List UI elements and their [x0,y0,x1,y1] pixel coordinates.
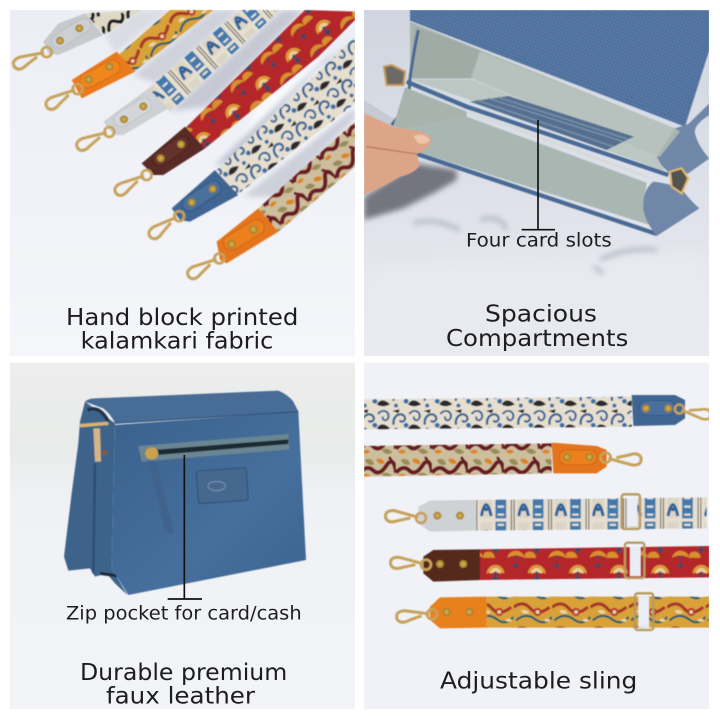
strap: blue panel print with grey leather and buckle [386,494,707,532]
heading: hand block printed kalamkari fabric: Hand block printed [66,305,298,331]
heading: durable premium faux leather: faux leather [106,683,256,709]
callout label: four card slots: Four card slots [466,231,612,252]
side gusset [64,402,127,595]
blue leather bag [64,391,306,595]
panel: hand block printed kalamkari fabric [10,10,355,356]
panel: adjustable sling [364,363,712,709]
flap: perforated blue leather [410,10,709,127]
heading: hand block printed kalamkari fabric [68,308,296,349]
strap: orange leather with maroon fabric [185,122,355,282]
callout label: zip pocket for card/cash: Zip pocket for card/cash [66,603,302,624]
strap: blue leather with blue fabric [147,37,355,242]
heading: adjustable sling: Adjustable sling [440,668,637,694]
panel: durable premium faux leather [10,363,355,709]
hand holding the bag open [364,113,431,195]
front panel [112,412,306,595]
zip pocket [138,434,289,533]
strap: orange leather with yellow fabric [44,10,213,113]
logo patch [196,468,248,504]
strap: blue kalamkari with blue leather [364,395,712,429]
heading: durable premium faux leather: Durable premium [80,660,287,686]
heading: durable premium faux leather [82,662,286,704]
heading: spacious compartments: Spacious [485,302,597,328]
heading: spacious compartments: Compartments [446,326,628,352]
card slots [470,96,634,150]
panel: spacious compartments [364,10,709,356]
heading: hand block printed kalamkari fabric: kalamkari fabric [81,328,273,354]
strap: grey leather with blue fabric [75,10,280,154]
shadow under hand [364,163,457,220]
callout line: zip pocket [168,455,202,599]
heading: spacious compartments [446,302,628,352]
strap: grey leather with dark fabric [12,10,140,72]
open bag with flap, compartments and gussets [384,10,709,236]
strap: red kalamkari with brown leather and buckle [391,543,709,582]
strap: brown leather with red fabric [113,10,355,199]
callout line: four card slots [522,120,555,230]
top flap [85,391,298,423]
strap: maroon kalamkari with orange leather [364,443,641,477]
strap: yellow kalamkari with orange leather and buckle [396,593,709,630]
gold clasp [80,423,108,462]
